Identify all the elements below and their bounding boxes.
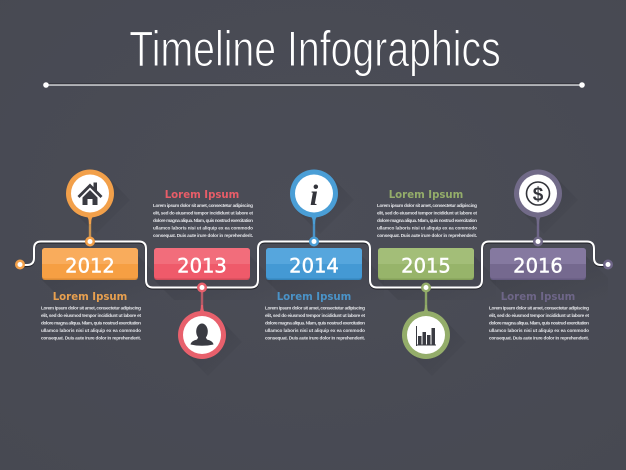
end node <box>603 260 613 270</box>
icon: person <box>190 324 214 346</box>
heading 2013: Lorem Ipsum <box>165 190 239 201</box>
body text 2013: elit, sed do eiusmod tempor incididunt ut labore et <box>153 210 253 216</box>
timeline path <box>24 242 604 288</box>
heading 2015: Lorem Ipsum <box>389 190 463 201</box>
panel: 2012 <box>41 170 141 340</box>
pin 2014 <box>290 170 338 246</box>
icon: dollar coin <box>526 182 550 206</box>
body text 2012: elit, sed do eiusmod tempor incididunt ut labore et <box>41 313 141 318</box>
body text 2013: dolore magna aliqua. Nlam, quis nostrud exercitation <box>153 218 253 223</box>
body text 2014 <box>265 306 365 340</box>
body text 2014: elit, sed do eiusmod tempor incididunt ut labore et <box>265 313 365 318</box>
year button 2013: 2013 <box>177 254 227 278</box>
panel: 2013 <box>153 190 253 359</box>
year button 2016: 2016 <box>513 254 563 278</box>
year button 2013 <box>154 248 250 280</box>
icon: info: i <box>310 179 319 212</box>
body text 2016: dolore magna aliqua. Nlam, quis nostrud exercitation <box>489 320 589 326</box>
body text 2014: consequat. Duis aute irure dolor in reprehenderit. <box>265 336 365 340</box>
icon: house <box>78 182 102 205</box>
year button 2012 <box>42 248 138 280</box>
body text 2015 <box>377 203 477 238</box>
panel: 2016 <box>489 170 589 340</box>
body text 2016: consequat. Duis aute irure dolor in reprehenderit. <box>489 336 589 340</box>
year button 2015: 2015 <box>401 254 451 278</box>
body text 2014: Lorem ipsum dolor sit amet, consectetur adipiscing <box>265 306 365 310</box>
long shadows <box>42 176 608 376</box>
body text 2014: ullamco laboris nisi ut aliquip ex ea commodo <box>265 328 365 333</box>
panel: 2014 <box>265 170 365 340</box>
heading 2014: Lorem Ipsum <box>277 292 351 303</box>
icon: dollar coin: $ <box>533 184 544 206</box>
body text 2016: ullamco laboris nisi ut aliquip ex ea commodo <box>489 328 589 333</box>
body text 2014: dolore magna aliqua. Nlam, quis nostrud exercitation <box>265 320 365 326</box>
body text 2013: Lorem ipsum dolor sit amet, consectetur adipiscing <box>153 203 253 208</box>
body text 2015: consequat. Duis aute irure dolor in reprehenderit. <box>377 233 477 238</box>
body text 2016 <box>489 306 589 340</box>
year button 2014 <box>266 248 362 280</box>
body text 2013: ullamco laboris nisi ut aliquip ex ea commodo <box>153 226 253 230</box>
pin 2015 <box>402 282 450 359</box>
year button 2015 <box>378 248 474 280</box>
year button 2012: 2012 <box>65 254 115 278</box>
body text 2012 <box>41 306 141 340</box>
heading 2016: Lorem Ipsum <box>501 292 575 303</box>
body text 2016: elit, sed do eiusmod tempor incididunt ut labore et <box>489 313 589 318</box>
year button 2016 <box>490 248 586 280</box>
panel: 2015 <box>377 190 477 359</box>
pin 2013 <box>178 282 226 359</box>
pin 2012 <box>66 170 114 246</box>
title rule <box>43 82 585 88</box>
heading 2012: Lorem Ipsum <box>53 292 127 303</box>
body text 2013 <box>153 203 253 238</box>
body text 2016: Lorem ipsum dolor sit amet, consectetur adipiscing <box>489 306 589 310</box>
icon: bar chart <box>416 326 436 346</box>
body text 2015: dolore magna aliqua. Nlam, quis nostrud exercitation <box>377 218 477 223</box>
body text 2015: Lorem ipsum dolor sit amet, consectetur adipiscing <box>377 203 477 208</box>
year button 2014: 2014 <box>289 254 339 278</box>
body text 2015: elit, sed do eiusmod tempor incididunt ut labore et <box>377 210 477 216</box>
start node <box>15 260 25 270</box>
body text 2012: consequat. Duis aute irure dolor in reprehenderit. <box>41 336 141 340</box>
body text 2012: Lorem ipsum dolor sit amet, consectetur adipiscing <box>41 306 141 310</box>
title: Timeline Infographics <box>129 20 501 77</box>
body text 2015: ullamco laboris nisi ut aliquip ex ea commodo <box>377 226 477 230</box>
pin 2016 <box>514 170 562 246</box>
body text 2012: dolore magna aliqua. Nlam, quis nostrud exercitation <box>41 320 141 326</box>
body text 2013: consequat. Duis aute irure dolor in reprehenderit. <box>153 233 253 238</box>
body text 2012: ullamco laboris nisi ut aliquip ex ea commodo <box>41 328 141 333</box>
